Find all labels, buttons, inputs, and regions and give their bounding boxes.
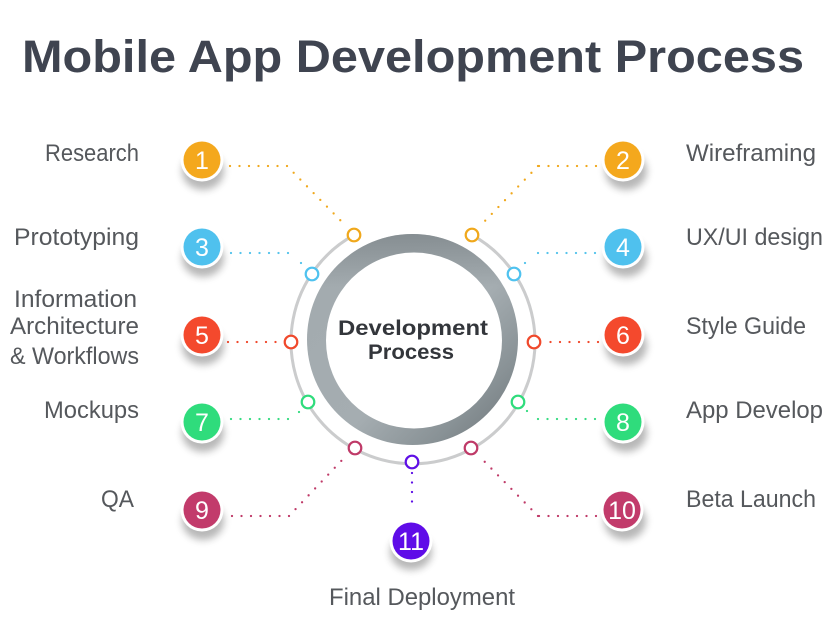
central ring: Development Process bbox=[307, 234, 518, 445]
step 4: UX/UI design: UX/UI design bbox=[686, 224, 823, 251]
step 8: App Develop bbox=[512, 396, 823, 452]
step 5: Information Architecture & Workflows: 5 bbox=[195, 322, 209, 350]
outer thin arc bbox=[291, 235, 535, 464]
step 3: Prototyping bbox=[14, 224, 318, 280]
step 5: Information Architecture & Workflows bbox=[10, 286, 297, 370]
step 1: Research: Research bbox=[45, 140, 139, 167]
step 10: Beta Launch bbox=[465, 442, 816, 540]
step 3: Prototyping: Prototyping bbox=[14, 224, 139, 251]
step 2: Wireframing: 2 bbox=[616, 147, 630, 175]
step 9: QA: 9 bbox=[195, 497, 209, 525]
step 11: Final Deployment: 11 bbox=[398, 528, 424, 556]
step 9: QA: QA bbox=[101, 486, 134, 513]
step 9: QA bbox=[101, 442, 361, 540]
step 1: Research bbox=[45, 138, 360, 241]
step 6: Style Guide bbox=[528, 313, 806, 365]
step 4: UX/UI design bbox=[508, 224, 823, 280]
step 7: Mockups: 7 bbox=[195, 409, 209, 437]
center label: Development bbox=[338, 317, 488, 340]
step 5: Information Architecture & Workflows: & Workflows bbox=[10, 343, 139, 370]
step 5: Information Architecture & Workflows: Information bbox=[14, 286, 137, 313]
step 6: Style Guide: Style Guide bbox=[686, 313, 806, 340]
step 5: Information Architecture & Workflows: Architecture bbox=[10, 313, 139, 340]
step 2: Wireframing: Wireframing bbox=[686, 140, 816, 167]
step 11: Final Deployment: Final Deployment bbox=[329, 584, 515, 611]
title: Mobile App Development Process bbox=[22, 31, 804, 82]
step 7: Mockups bbox=[44, 396, 314, 452]
step 2: Wireframing bbox=[466, 138, 816, 241]
step 8: App Develop: App Develop bbox=[686, 397, 823, 424]
step 4: UX/UI design: 4 bbox=[616, 234, 630, 262]
step 3: Prototyping: 3 bbox=[195, 234, 209, 262]
step 10: Beta Launch: 10 bbox=[608, 497, 636, 525]
step 7: Mockups: Mockups bbox=[44, 397, 139, 424]
step 8: App Develop: 8 bbox=[616, 409, 630, 437]
center label second line: Process bbox=[368, 341, 454, 364]
step 10: Beta Launch: Beta Launch bbox=[686, 486, 816, 513]
step 6: Style Guide: 6 bbox=[616, 322, 630, 350]
step 11: Final Deployment bbox=[329, 456, 515, 611]
step 1: Research: 1 bbox=[195, 147, 209, 175]
